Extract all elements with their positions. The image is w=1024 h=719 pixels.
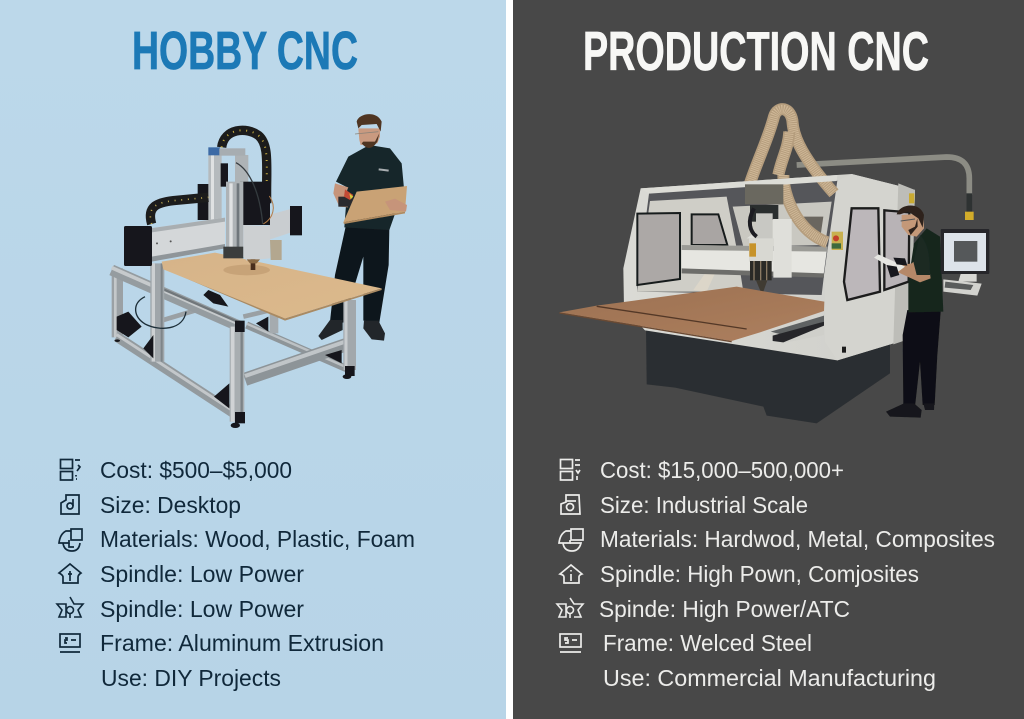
- stat: materials: Materials: Wood, Plastic, Foam: [100, 526, 415, 552]
- machine cabinet: [623, 174, 915, 360]
- icon: frame screen: [560, 634, 581, 652]
- spindle head: [745, 184, 792, 292]
- panel: production CNC: [513, 0, 1024, 719]
- extraction rails: [770, 316, 824, 343]
- icon: materials shapes: [559, 529, 583, 551]
- illustration: production CNC machine and operator: [559, 109, 989, 423]
- stat: frame: Frame: Welced Steel: [603, 630, 812, 656]
- top frame bar: [641, 175, 837, 194]
- hobby machine rear motor and columns: [198, 147, 248, 220]
- stat: cost: Cost: $15,000–500,000+: [600, 457, 844, 483]
- hobby machine brackets and feet: [115, 290, 355, 428]
- heading: hobby CNC: HOBBY CNC: [132, 21, 358, 81]
- hobby machine frame: [112, 263, 350, 422]
- production wood sheet: [559, 287, 824, 342]
- icon: cost grid: [60, 460, 80, 480]
- hobby machine cables: [136, 297, 186, 328]
- stat: size: Size: Industrial Scale: [600, 492, 808, 518]
- icon: star bulb: [57, 597, 83, 618]
- hobby machine gantry: [124, 206, 302, 266]
- icon: star bulb: [557, 598, 583, 618]
- stat: spindle repeat: Spindle: Low Power: [100, 596, 304, 622]
- stat: use: Use: DIY Projects: [101, 665, 281, 691]
- machine base: [646, 328, 890, 423]
- stat: frame: Frame: Aluminum Extrusion: [100, 630, 384, 656]
- stat: size: Size: Desktop: [100, 492, 241, 518]
- icon: size box: [61, 495, 79, 514]
- stats list: hobby CNC: [57, 457, 415, 691]
- operator: production: [874, 206, 943, 418]
- icon: materials shapes: [59, 529, 82, 551]
- icon: frame screen: [60, 634, 80, 652]
- icon: house info: [59, 564, 81, 583]
- icon: cost grid: [560, 460, 580, 480]
- operator: hobby: [318, 114, 407, 341]
- gantry beam: [682, 245, 827, 278]
- stat: use: Use: Commercial Manufacturing: [603, 665, 936, 691]
- illustration: hobby CNC machine and operator: [112, 114, 407, 428]
- hobby machine wood table: [162, 253, 382, 321]
- stat: spindle: Spindle: Low Power: [100, 561, 304, 587]
- hobby machine drag chains: [150, 130, 267, 224]
- control monitor: [941, 229, 989, 296]
- panel: hobby CNC: [0, 0, 506, 719]
- icon: house info: [560, 565, 582, 583]
- control panel label: [832, 232, 843, 250]
- hobby machine spindle carriage: [223, 163, 273, 270]
- stats list: production CNC: [557, 457, 995, 691]
- stat: cost: Cost: $500–$5,000: [100, 457, 292, 483]
- stat: spindle and tool changer: Spinde: High Power/ATC: [599, 596, 850, 622]
- stat: materials: Materials: Hardwod, Metal, Composites: [600, 526, 995, 552]
- overhead pipe: [797, 157, 974, 220]
- dust hoses: [750, 109, 834, 242]
- icon: size box: [561, 495, 580, 514]
- stat: spindle: Spindle: High Pown, Comjosites: [600, 561, 919, 587]
